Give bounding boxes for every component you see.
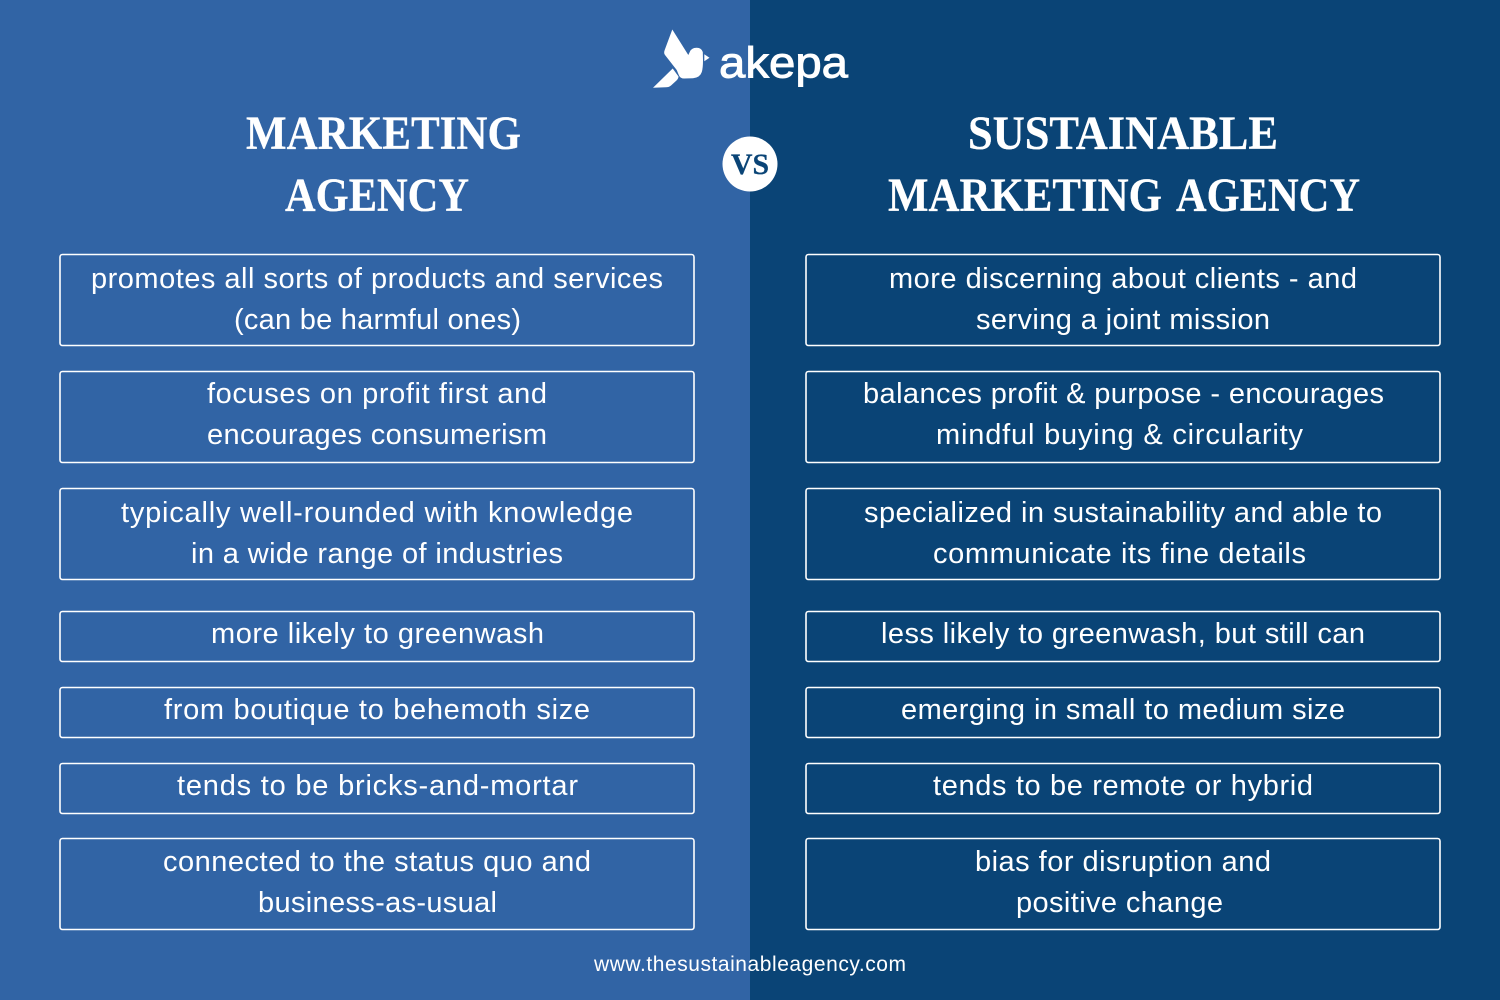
row: location [806,764,1440,814]
row: greenwash: less likely to greenwash, but still can [881,618,1365,650]
panel background: sustainable marketing agency [750,0,1500,1000]
row: greenwash [806,612,1440,662]
heading: marketing agency: AGENCY [285,169,469,222]
row: disruption: positive change [1016,887,1223,919]
panel: marketing agency rows [60,254,694,930]
row: profit and purpose [806,372,1440,462]
row: disruption: bias for disruption and [975,846,1271,878]
row: location [60,764,694,814]
row: profit and purpose: balances profit & purpose - encourages [863,378,1384,410]
row: profit: encourages consumerism [207,419,547,451]
row: clients: serving a joint mission [976,304,1270,336]
row: profit: focuses on profit first and [207,378,547,410]
row: specialized: specialized in sustainability and able to [864,497,1382,529]
heading: marketing agency: MARKETING [246,107,521,160]
row: knowledge [60,488,694,580]
row: status quo: business-as-usual [258,887,497,919]
row: size: from boutique to behemoth size [164,694,590,726]
row: specialized [806,488,1440,580]
row: knowledge: in a wide range of industries [191,538,563,570]
logo wordmark: akepa [719,38,849,88]
panel: sustainable marketing agency rows [806,254,1440,930]
row: profit and purpose: mindful buying & circularity [936,419,1304,451]
heading: sustainable marketing agency [888,107,1360,222]
row: products: promotes all sorts of products and services [91,263,663,295]
row: knowledge: typically well-rounded with knowledge [121,497,633,529]
row: size [806,688,1440,738]
row: status quo [60,838,694,930]
icon: bird [653,30,710,88]
row: products [60,254,694,346]
row: location: tends to be remote or hybrid [933,770,1313,802]
heading: sustainable marketing agency: SUSTAINABLE [968,107,1278,160]
footer url: www.thesustainableagency.com [593,953,906,976]
row: clients: more discerning about clients - and [889,263,1357,295]
row: size [60,688,694,738]
heading: sustainable marketing agency: AGENCY [1176,169,1360,222]
row: greenwash [60,612,694,662]
row: specialized: communicate its fine details [933,538,1306,570]
panel background: marketing agency [0,0,750,1000]
logo: akepa [653,30,849,88]
heading: sustainable marketing agency: MARKETING [888,169,1162,222]
row: greenwash: more likely to greenwash [211,618,544,650]
row: products: (can be harmful ones) [234,304,521,336]
row: status quo: connected to the status quo and [163,846,591,878]
vs badge [722,136,778,192]
row: disruption [806,838,1440,930]
row: location: tends to be bricks-and-mortar [177,770,578,802]
row: size: emerging in small to medium size [901,694,1345,726]
heading: marketing agency [246,107,521,222]
vs badge: VS [731,148,769,181]
row: clients [806,254,1440,346]
row: profit [60,372,694,462]
